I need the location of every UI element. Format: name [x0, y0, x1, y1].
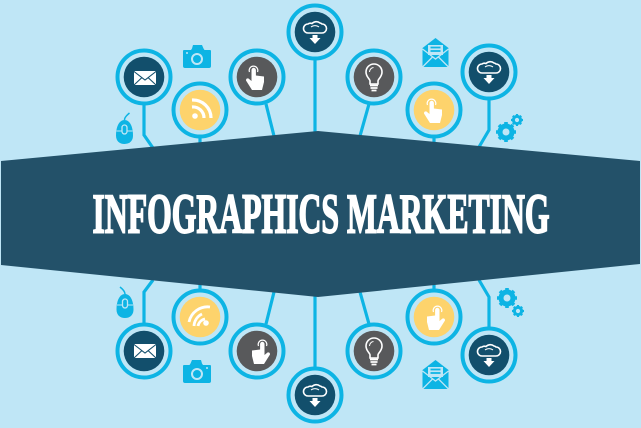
connector lines [144, 60, 489, 367]
node: cloud right top [462, 46, 516, 98]
node: bulb bottom [348, 324, 400, 378]
node: yellow hand top [408, 84, 460, 136]
icon: camera top [183, 45, 211, 68]
node: envelope bottom [118, 324, 170, 378]
icon: gears bottom [497, 288, 524, 317]
icon: mail bottom [422, 360, 448, 389]
icon: mouse top [116, 113, 133, 144]
node: hand top [230, 50, 284, 104]
node: hand bottom [230, 324, 284, 378]
node: bulb top [348, 50, 400, 104]
node: rss top [174, 84, 226, 136]
node: cloud bottom [288, 368, 342, 422]
node: yellow hand bottom [408, 290, 460, 344]
node: cloud top [288, 6, 342, 58]
icon: mouse bottom [116, 287, 134, 318]
node: wifi bottom [174, 290, 226, 344]
icon: camera bottom [183, 360, 211, 383]
node: envelope top [118, 50, 170, 104]
icon: gears top [496, 114, 523, 142]
node: cloud right bottom [462, 328, 516, 382]
icon: mail top [422, 38, 448, 67]
